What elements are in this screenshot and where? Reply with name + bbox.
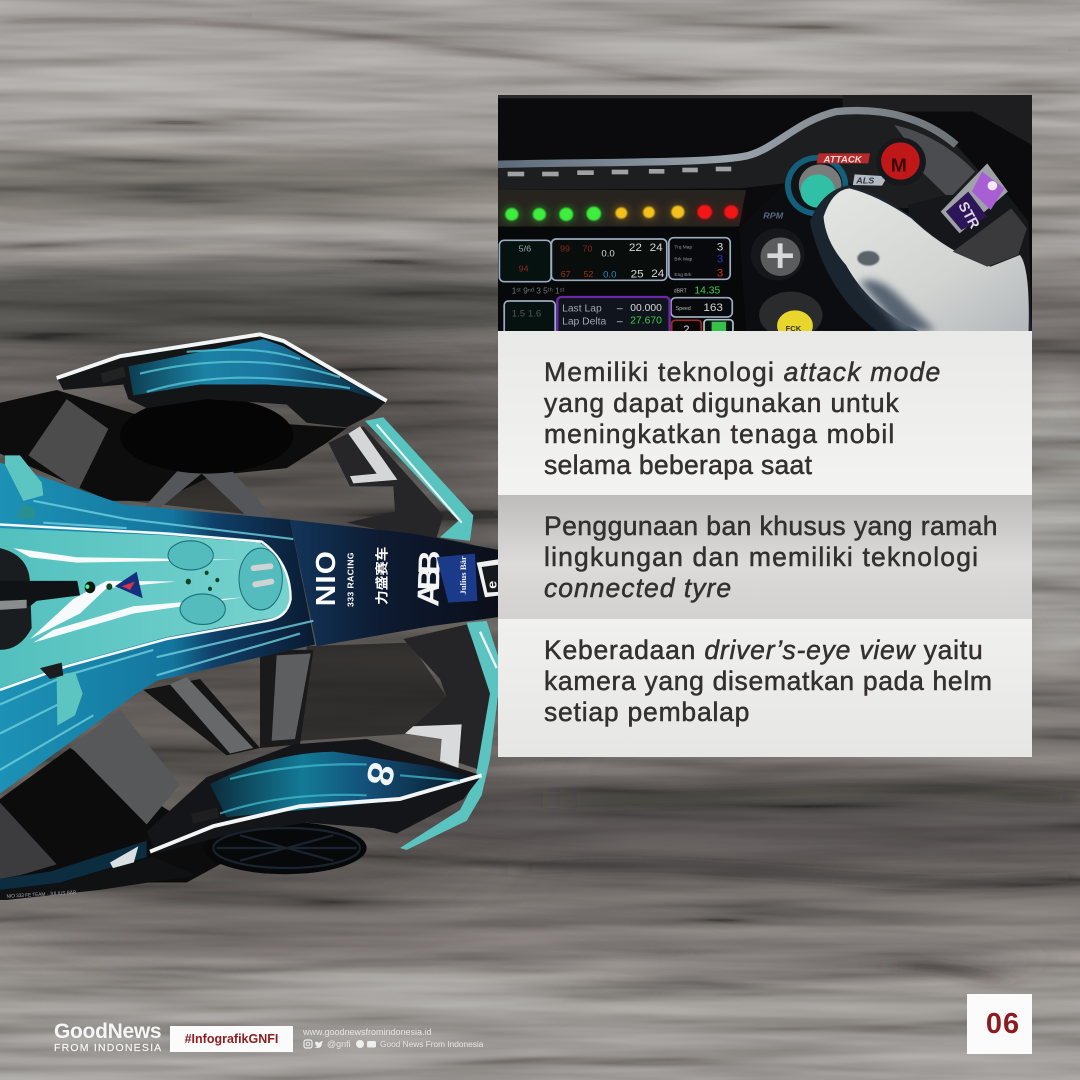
dashboard screen: Last Lap [562, 304, 602, 315]
social icons and handles [303, 1039, 484, 1049]
racing car, top view [0, 332, 500, 900]
dashboard screen: 25 [631, 269, 644, 281]
text: attack mode description: yang dapat digunakan untuk [544, 388, 900, 418]
buttons cluster: ATTACK [823, 154, 863, 165]
dashboard screen: 24 [650, 242, 663, 254]
lower fender: 8 [358, 758, 402, 790]
page number: 06 [986, 1008, 1020, 1040]
car shadow and dark underfloor [0, 390, 447, 883]
wheel rim highlight [498, 111, 956, 164]
text: attack mode description: Memiliki teknologi attack mode [544, 357, 941, 387]
panel: attack mode [498, 331, 1032, 495]
text: attack mode description [544, 357, 941, 480]
buttons cluster [739, 138, 926, 341]
dashboard screen: 3 [717, 267, 723, 279]
nose sponsor logos: ABB [411, 550, 447, 607]
dashboard screen: 99 [560, 244, 570, 254]
hashtag label [170, 1026, 293, 1052]
dashboard screen: Trq Map [674, 244, 693, 250]
social icons and handles: Good News From Indonesia [380, 1039, 483, 1049]
dashboard screen: 1ˢᵗ 9ⁿᵈ 3 5ᵗʰ 1ˢᵗ [512, 286, 564, 295]
page number [967, 994, 1032, 1054]
dashboard screen: 163 [703, 302, 723, 314]
text: tyre description: connected tyre [544, 573, 732, 603]
text: tyre description: Penggunaan ban khusus yang ramah [544, 511, 998, 541]
dashboard screen: 67 [561, 269, 571, 279]
social icons and handles: @gnfi [327, 1039, 351, 1049]
dashboard screen: 1.5 1.6 [512, 309, 541, 320]
nose sponsor logos: NIO [311, 550, 342, 606]
dashboard screen: Brk Map [674, 257, 693, 263]
dashboard screen: 3 [717, 241, 723, 253]
dashboard screen: 0.0 [603, 270, 616, 281]
dashboard screen: 14.35 [694, 285, 721, 296]
nose sponsor logos: 333 RACING [346, 552, 355, 607]
text: attack mode description: meningkatkan tenaga mobil [544, 419, 895, 449]
gloved thumb [810, 163, 1032, 331]
nose sponsor logos [311, 547, 500, 607]
buttons cluster: ALS [855, 176, 874, 186]
dashboard screen: – [617, 304, 623, 315]
website and social text [303, 1027, 484, 1049]
grey suspension panels [28, 399, 311, 824]
lower wheel rim [213, 828, 360, 868]
text: tyre description: lingkungan dan memiliki teknologi [544, 542, 979, 572]
dashboard screen: 52 [583, 269, 593, 279]
text: camera description: setiap pembalap [544, 697, 750, 727]
dashboard screen: 5/6 [519, 244, 531, 254]
rear left logo plate [0, 841, 197, 901]
dashboard screen: – [617, 316, 623, 327]
panel: steering wheel photo [498, 95, 1032, 331]
text: attack mode description: selama beberapa saat [544, 450, 812, 480]
dashboard screen [498, 227, 746, 337]
dashboard LED strip [498, 190, 746, 227]
text: camera description: Keberadaan driver’s-eye view yaitu [544, 635, 983, 665]
upper front wing [328, 417, 473, 544]
text: tyre description [544, 511, 998, 603]
upper front tyre [120, 397, 293, 474]
lower fender [147, 739, 482, 853]
upper fender [57, 334, 387, 427]
dashboard screen: Lap Delta [562, 316, 607, 327]
rear left logo plate: NIO 333 FE TEAM · JULIUS BÄR [6, 889, 77, 900]
dashboard screen: 70 [582, 244, 592, 254]
panel: connected tyre [498, 495, 1032, 619]
dashboard screen: 0.0 [601, 248, 615, 259]
nose sponsor logos: 力盛赛车 [374, 547, 390, 605]
gloved thumb: STR [954, 199, 982, 232]
text: camera description [544, 635, 993, 727]
logo: GoodNews From Indonesia [54, 1020, 162, 1054]
panel: driver's-eye view [498, 619, 1032, 757]
dashboard screen: Speed [676, 306, 691, 312]
dashboard screen: Eng Brk [674, 272, 692, 278]
dashboard screen: 27.670 [630, 316, 662, 327]
mirrors [5, 455, 83, 726]
dashboard screen: 00.000 [630, 303, 662, 314]
lower front wing [400, 621, 498, 850]
main bodywork [0, 463, 498, 793]
dashboard screen: dBRT [674, 288, 687, 294]
hashtag label: #InfografikGNFI [185, 1032, 278, 1046]
buttons cluster: RPM [763, 210, 784, 220]
lower front tyre [203, 822, 367, 874]
nose sponsor logos: Julius Bär [459, 556, 468, 595]
dashboard screen: 24 [651, 268, 665, 280]
dashboard screen: 3 [717, 253, 723, 265]
buttons cluster: M [891, 156, 907, 177]
logo: GoodNews From Indonesia: GoodNews [54, 1020, 161, 1043]
text: camera description: kamera yang disematkan pada helm [544, 666, 993, 696]
dashboard screen: 94 [519, 264, 529, 274]
dashboard screen: 22 [629, 242, 642, 254]
website and social text: www.goodnewsfromindonesia.id [303, 1027, 432, 1037]
logo: GoodNews From Indonesia: FROM INDONESIA [54, 1042, 162, 1054]
nose sponsor logos: e [484, 580, 500, 589]
